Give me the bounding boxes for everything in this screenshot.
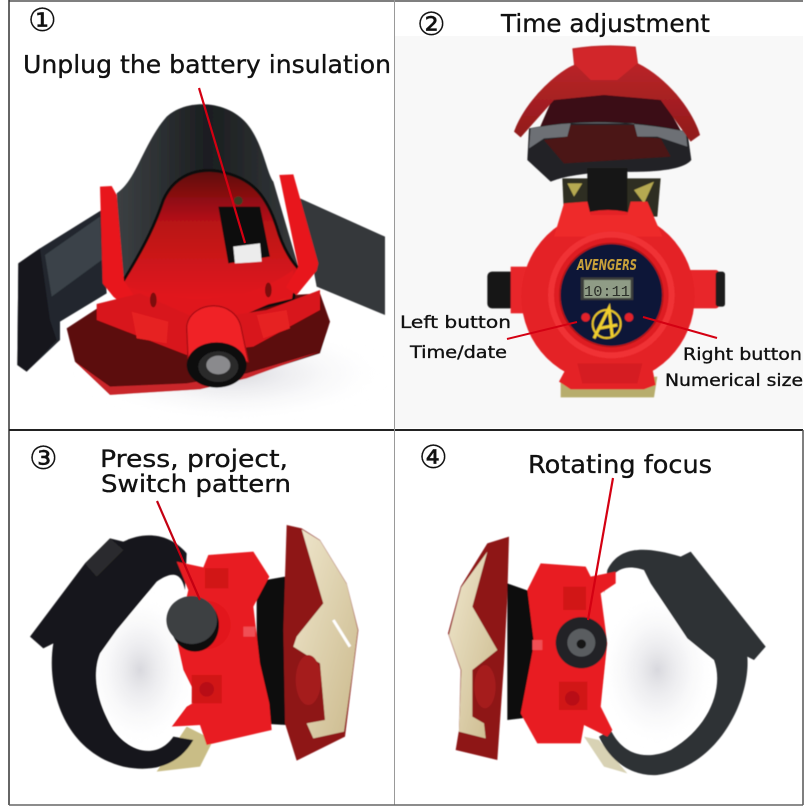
photo: watch back with battery tab	[17, 104, 393, 423]
step number 1: ①	[28, 1, 57, 39]
step number 4: ④	[419, 438, 448, 476]
panel 4: rotating focus	[419, 438, 766, 775]
photo: watch side view with lens	[448, 537, 766, 775]
heading: press, project, switch pattern	[100, 445, 291, 498]
photo: open watch front with display	[487, 45, 725, 397]
heading: press, project, switch pattern: Switch pattern	[101, 470, 291, 498]
panel 1: battery insulation	[17, 1, 393, 423]
photo background	[395, 36, 803, 428]
label: numerical size: Numerical size	[665, 371, 803, 391]
label: time/date: Time/date	[409, 343, 507, 363]
left pointer line	[507, 322, 577, 339]
label: right button: Right button	[683, 345, 802, 365]
watch time display: 10:11	[584, 284, 630, 301]
step number 2: ②	[417, 5, 446, 43]
photo: watch side view with button	[30, 525, 358, 772]
watch brand text: AVENGERS	[576, 256, 637, 274]
panel 3: press, project, switch pattern	[29, 439, 358, 772]
red pointer line	[588, 478, 613, 620]
right pointer line	[643, 317, 717, 338]
heading: rotating focus: Rotating focus	[528, 450, 712, 479]
label: left button: Left button	[400, 313, 511, 333]
red pointer line	[199, 88, 245, 243]
panel 2: time adjustment	[395, 5, 803, 428]
heading: unplug the battery insulation: Unplug the battery insulation	[23, 50, 391, 79]
red pointer line	[157, 501, 200, 600]
heading: time adjustment: Time adjustment	[500, 9, 710, 38]
step number 3: ③	[29, 439, 58, 477]
heading: press, project, switch pattern: Press, project,	[100, 445, 288, 473]
